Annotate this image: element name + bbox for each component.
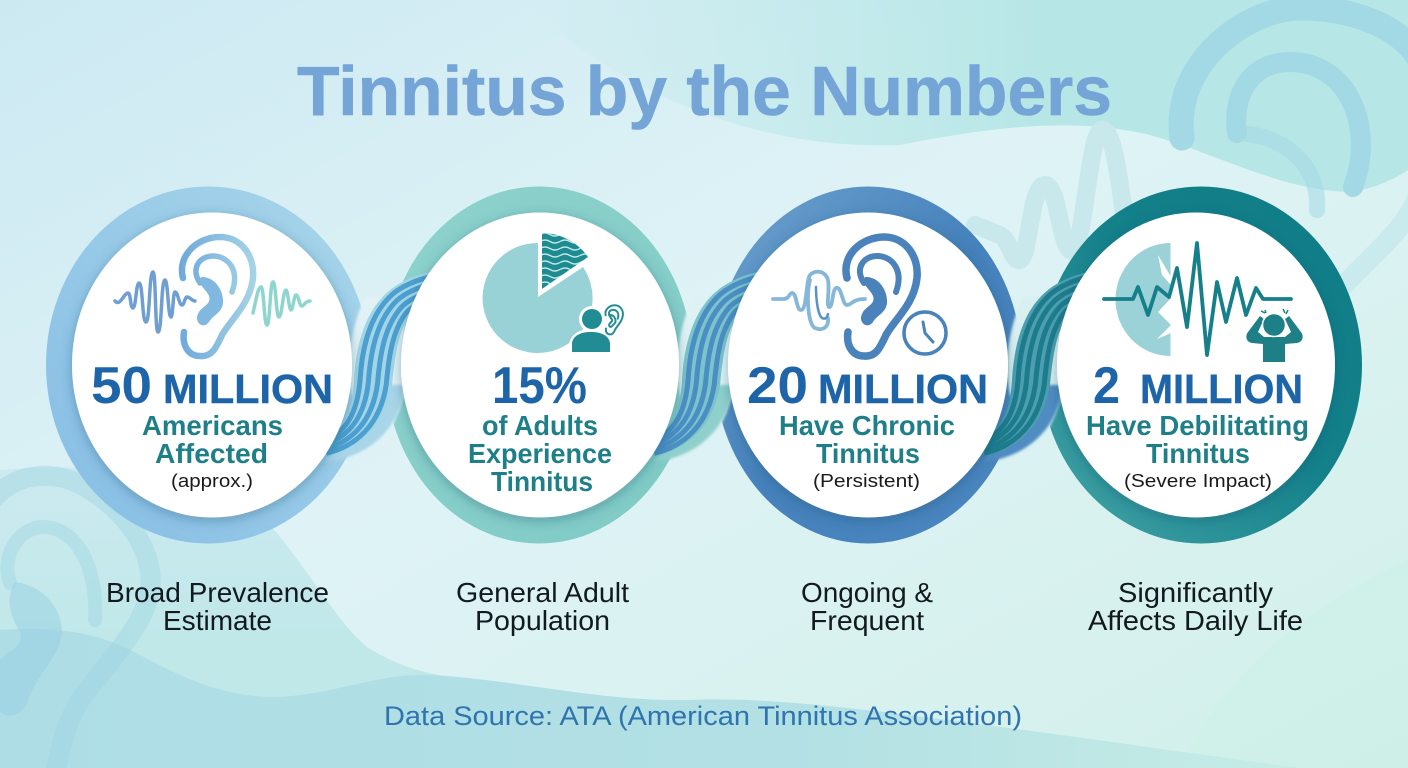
icon: pie chart with person and ear — [483, 230, 623, 356]
stat: 50 million: 50 — [91, 357, 152, 415]
caption: daily life — [1088, 577, 1303, 636]
caption: general adult — [456, 577, 629, 636]
description: Tinnitus — [1146, 438, 1250, 469]
ring: 2 million — [1040, 186, 1362, 544]
panel: 15 percent of adults — [401, 212, 679, 518]
data source: Data Source: ATA (American Tinnitus Association) — [384, 701, 1022, 731]
description: Tinnitus — [816, 438, 920, 469]
panel: 50 million americans — [72, 212, 352, 518]
description: (Severe Impact) — [1124, 470, 1272, 491]
caption: daily life: Affects Daily Life — [1088, 605, 1303, 636]
stat: 50 million: MILLION — [163, 366, 333, 412]
description: (Persistent) — [813, 470, 920, 491]
stat: 20 million: 20 — [747, 357, 808, 415]
description: Tinnitus — [491, 466, 593, 497]
ring: 15 percent — [385, 186, 693, 544]
description: Have Chronic — [779, 410, 955, 441]
stat: 15 percent: 15% — [492, 357, 587, 415]
stat: 2 million: 2 — [1093, 357, 1120, 415]
description: (approx.) — [171, 470, 253, 491]
connector: wave band 1 — [322, 272, 430, 462]
caption: general adult: General Adult — [456, 577, 629, 608]
caption: daily life: Significantly — [1118, 577, 1273, 608]
caption: general adult: Population — [475, 605, 610, 636]
description: Have Debilitating — [1086, 410, 1309, 441]
ring: 50 million — [46, 186, 370, 544]
stat: 20 million: MILLION — [818, 366, 988, 412]
stat: 2 million: MILLION — [1140, 366, 1303, 412]
stat: 50 million — [91, 357, 333, 415]
stat: 20 million — [747, 357, 988, 415]
icon: ear with sound waves — [115, 237, 310, 356]
title: Tinnitus by the Numbers — [297, 52, 1112, 130]
panel: 20 million chronic — [728, 212, 1008, 518]
caption: broad prevalence: Broad Prevalence — [106, 577, 329, 608]
caption: ongoing — [801, 577, 933, 636]
description: Affected — [155, 438, 268, 469]
caption: ongoing: Frequent — [810, 605, 924, 636]
description: Experience — [468, 438, 612, 469]
description — [779, 410, 955, 491]
ring: 20 million — [714, 186, 1022, 544]
caption: broad prevalence — [106, 577, 329, 636]
caption: broad prevalence: Estimate — [163, 605, 272, 636]
description — [142, 410, 283, 491]
description: Americans — [142, 410, 283, 441]
connector: wave band 2 — [650, 272, 758, 462]
stat: 2 million — [1093, 357, 1303, 415]
icon: ear with wave and clock — [773, 237, 946, 356]
icon: cracked head, pulse and distressed person — [1104, 243, 1303, 362]
description — [1086, 410, 1309, 491]
caption: ongoing: Ongoing & — [801, 577, 933, 608]
description: of Adults — [482, 410, 598, 441]
connector: wave band 3 — [980, 272, 1088, 462]
panel: 2 million debilitating — [1057, 212, 1335, 518]
description — [468, 410, 612, 497]
